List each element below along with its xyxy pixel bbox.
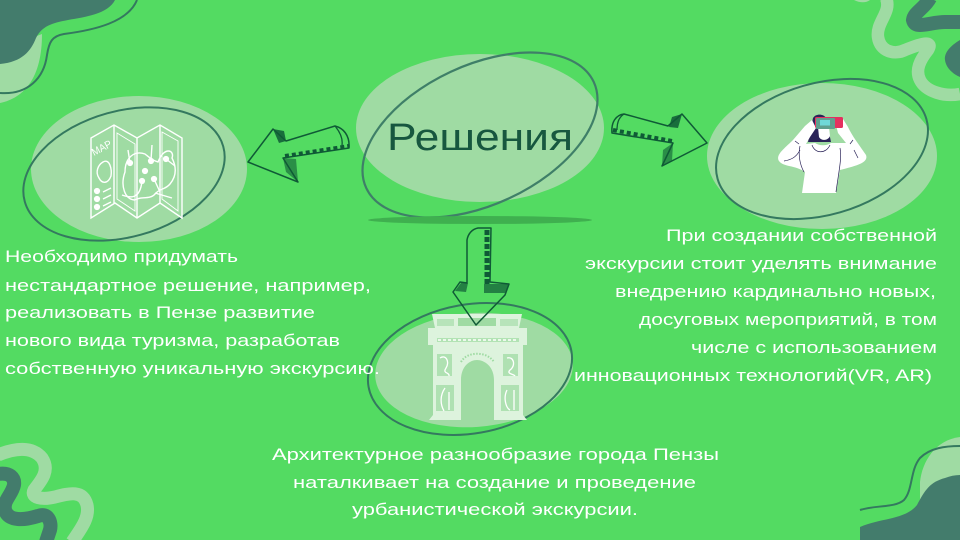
icon: folded map: MAP <box>90 138 114 159</box>
decoration: top-right corner <box>854 0 960 95</box>
arch backdrop <box>371 306 577 434</box>
arrow: right <box>612 114 707 166</box>
arrow: left <box>248 126 349 182</box>
panel: map circle <box>8 86 247 262</box>
text: left block: собственную уникальную экскурсию. <box>5 359 380 378</box>
text: left block: нового вида туризма, разработав <box>5 331 340 350</box>
map outline <box>8 86 240 262</box>
panel: central title oval <box>337 19 623 251</box>
title shadow <box>368 216 592 224</box>
text: right block: инновационных технологий(VR, AR) <box>574 366 932 385</box>
text: bottom block: урбанистической экскурсии. <box>352 500 638 519</box>
text: right block: досуговых мероприятий, в том <box>639 310 937 329</box>
text: right block: числе с использованием <box>691 338 937 357</box>
arrow: down <box>453 228 509 325</box>
icon: triumphal arch <box>428 314 527 420</box>
text: left block <box>5 247 380 378</box>
text: bottom block: Архитектурное разнообразие города Пензы <box>272 445 719 464</box>
arch outline <box>357 288 583 450</box>
decoration: top-left corner <box>0 0 137 103</box>
text: right block <box>574 226 937 385</box>
text: right block: При создании собственной <box>666 226 937 245</box>
text: right block: экскурсии стоит уделять внимание <box>585 254 937 273</box>
title backdrop <box>356 54 604 202</box>
map backdrop <box>31 96 247 242</box>
title: Решения <box>387 117 573 159</box>
panel: arch circle <box>357 288 583 450</box>
text: left block: реализовать в Пензе развитие <box>5 303 315 322</box>
VR outline <box>699 56 945 242</box>
VR backdrop <box>707 83 937 229</box>
text: bottom block <box>272 445 719 519</box>
decoration: bottom-right corner <box>860 437 960 540</box>
text: bottom block: наталкивает на создание и проведение <box>293 473 696 492</box>
text: left block: нестандартное решение, например, <box>5 276 371 295</box>
title outline <box>337 19 623 251</box>
text: right block: внедрению кардинально новых, <box>615 282 936 301</box>
decoration: bottom-left corner <box>0 449 88 540</box>
icon: folded map <box>90 125 182 218</box>
panel: VR circle <box>699 56 945 242</box>
text: left block: Необходимо придумать <box>5 247 238 266</box>
icon: woman with VR headset <box>778 115 866 193</box>
